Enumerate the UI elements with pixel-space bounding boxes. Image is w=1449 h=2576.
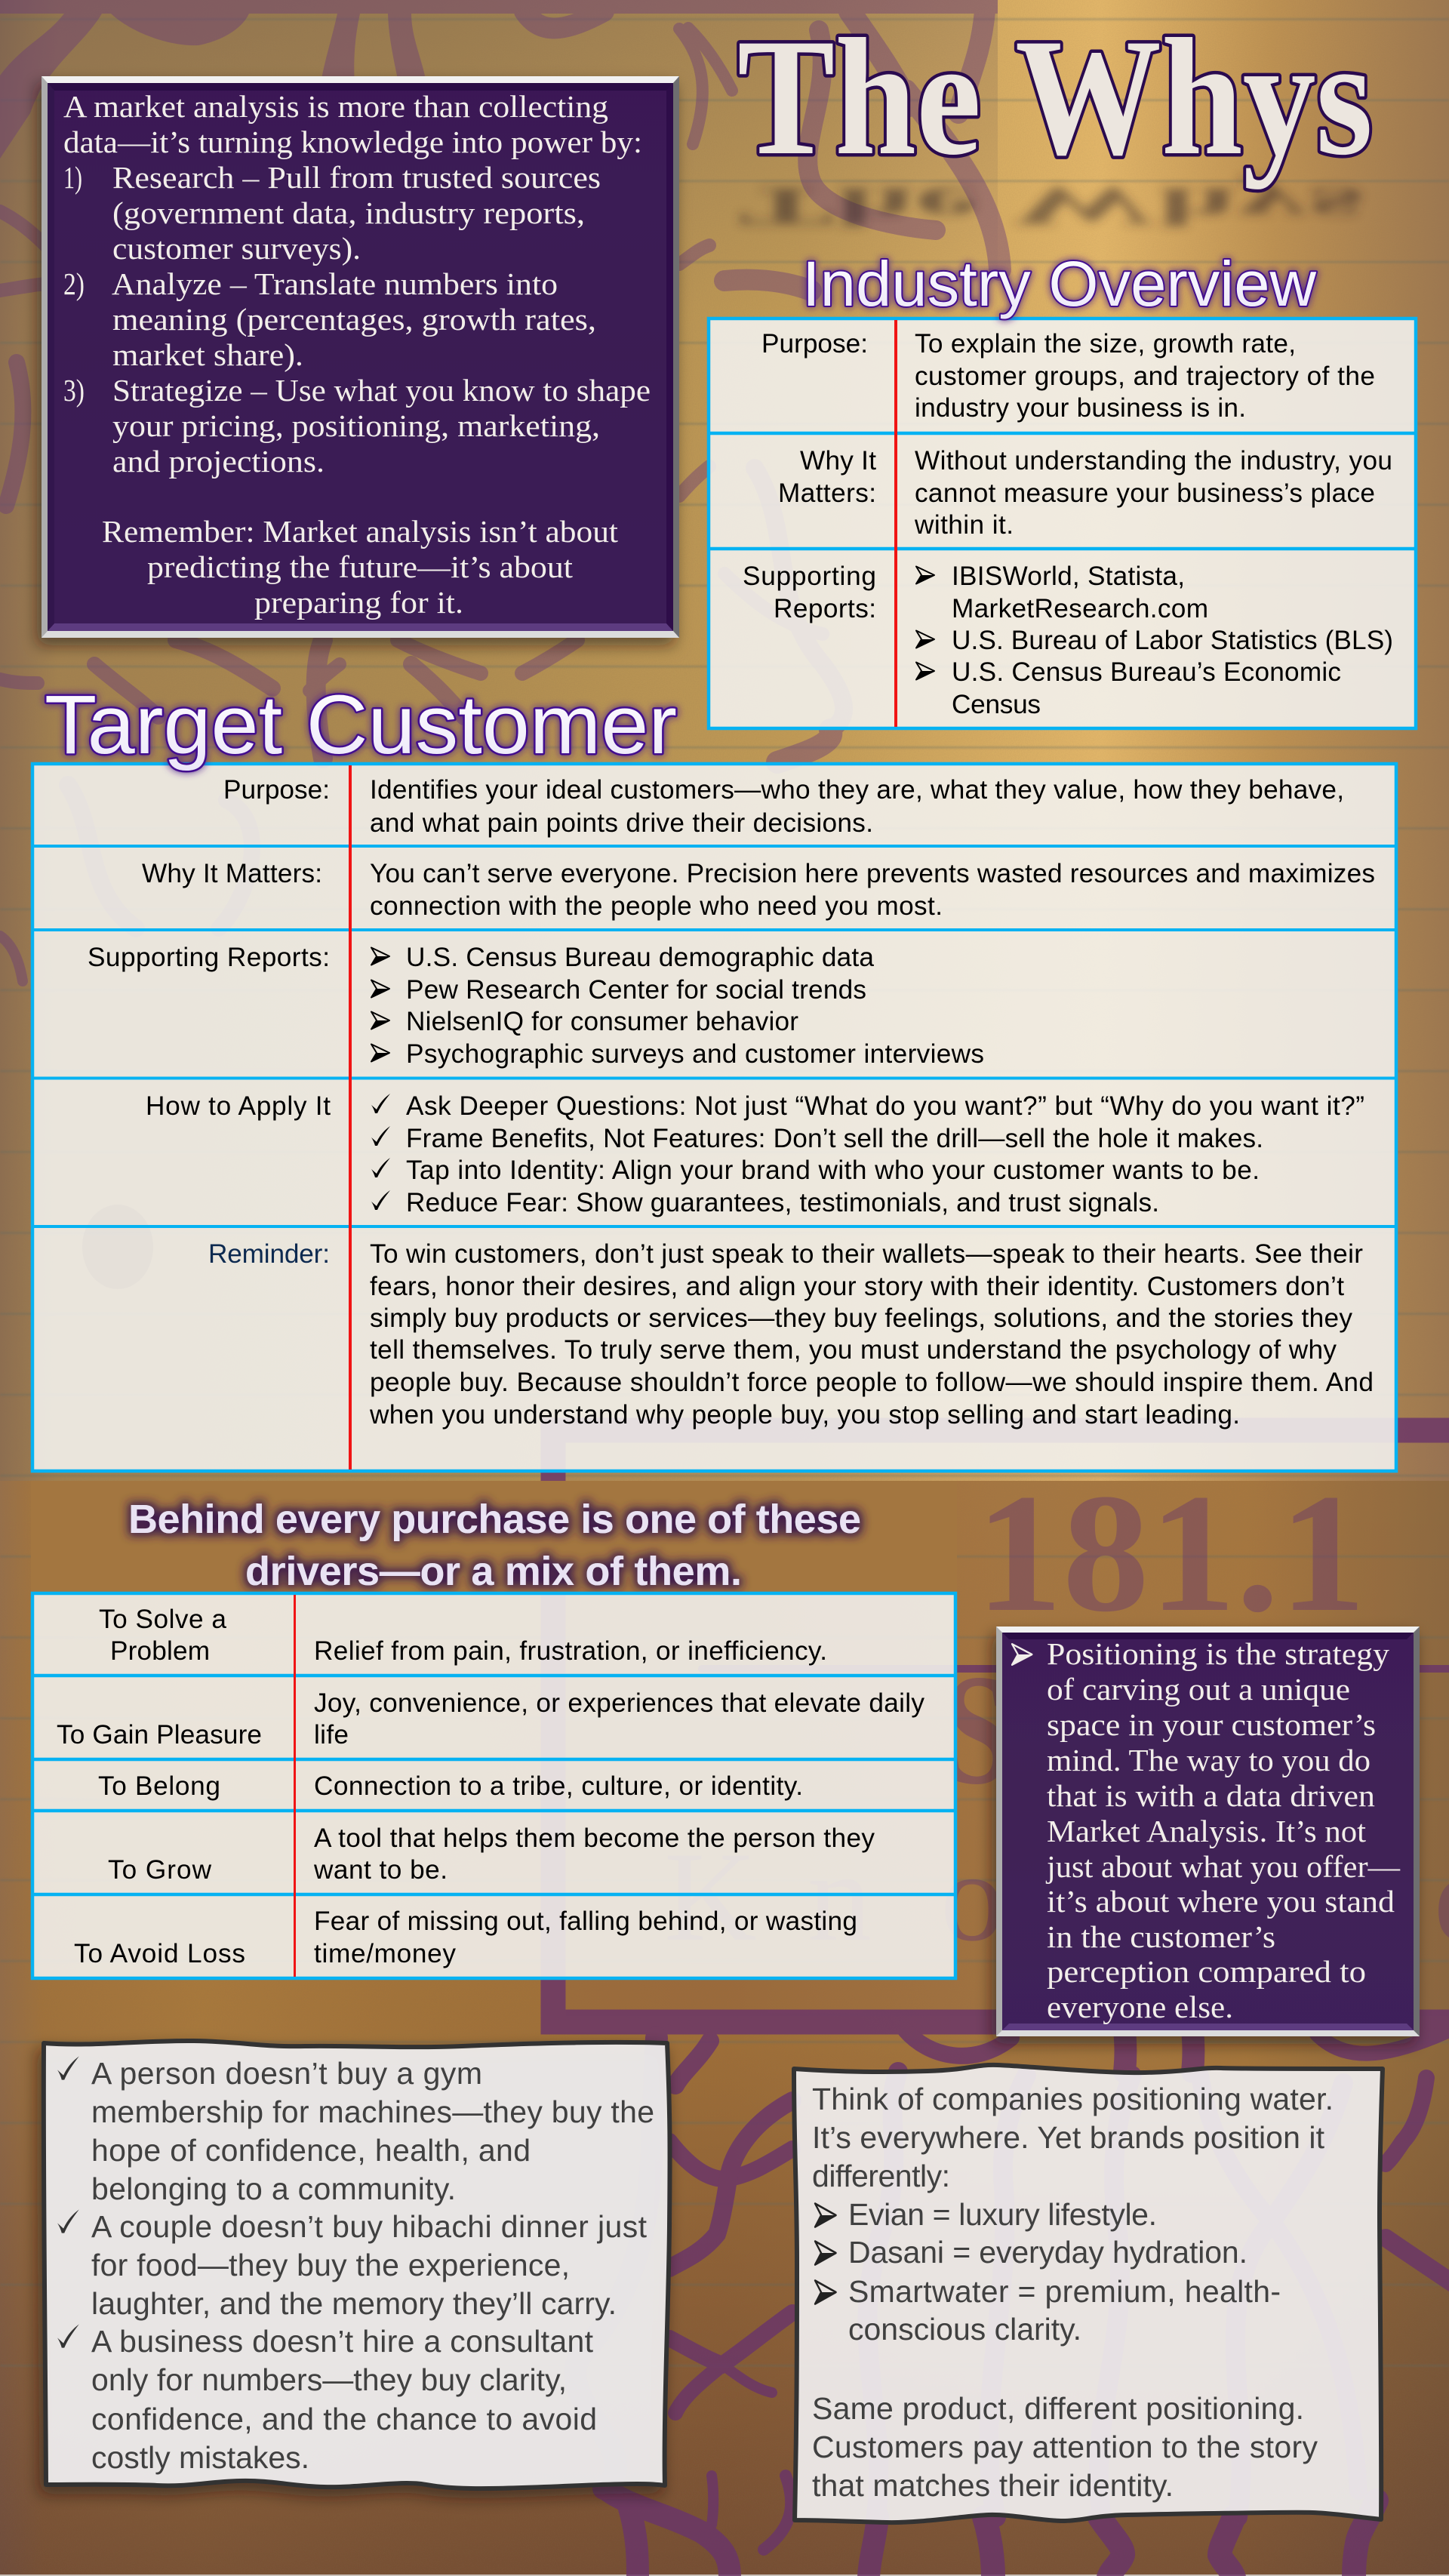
row: purpose: customer groups, and trajectory of the: [915, 362, 1375, 391]
heading: Target Customer: Target Customer: [45, 679, 677, 771]
wavy paper: [794, 2065, 1383, 2522]
definition text: that is with a data driven: [1047, 1778, 1375, 1813]
row: why it matters: connection with the people who need you most.: [370, 891, 943, 921]
row: to avoid loss: time/money: [314, 1939, 456, 1968]
row: supporting reports: Census: [952, 690, 1041, 719]
row: supporting reports: [743, 562, 1393, 719]
row: how to apply it: [146, 1091, 1364, 1217]
definition text: of carving out a unique: [1047, 1672, 1350, 1707]
row: how to apply it: Frame Benefits, Not Features: Don’t sell the drill—sell the hole it makes.: [406, 1124, 1263, 1153]
example: consultant: A business doesn’t hire a consultant: [91, 2324, 594, 2359]
panel: market analysis summary: data—it’s turning knowledge into power by:: [63, 125, 642, 159]
row: supporting reports: Psychographic surveys and customer interviews: [406, 1039, 984, 1069]
row: reminder: To win customers, don’t just speak to their wallets—speak to their hearts. See their: [370, 1239, 1363, 1269]
numbered list: [63, 160, 651, 479]
row: to grow: A tool that helps them become the person they: [314, 1824, 875, 1853]
table: target customer: [32, 764, 1396, 1471]
row: to avoid loss: [74, 1907, 857, 1968]
numbered list: 1): [63, 160, 82, 195]
heading: Industry Overview: Industry Overview: [802, 248, 1316, 319]
brand list: Evian = luxury lifestyle.: [848, 2197, 1157, 2232]
numbered list: 2): [63, 266, 85, 301]
conclusion text: Same product, different positioning.: [812, 2391, 1304, 2426]
panel frame and fill: [42, 76, 679, 638]
row: to belong: [98, 1771, 803, 1801]
title: The Whys: The Whys: [737, 5, 1373, 190]
brand list: conscious clarity.: [848, 2312, 1081, 2347]
row: why it matters: You can’t serve everyone. Precision here prevents wasted resources and maximizes: [370, 859, 1375, 888]
row: purpose: Purpose:: [761, 329, 868, 359]
remember note: preparing for it.: [254, 585, 463, 620]
panel: positioning definition: [996, 1627, 1420, 2036]
faded number 181.1: 181.1: [976, 1458, 1366, 1647]
panel: market analysis summary: [42, 76, 679, 638]
row: to belong: Connection to a tribe, culture, or identity.: [314, 1771, 803, 1801]
row: supporting reports: MarketResearch.com: [952, 594, 1208, 623]
row: why it matters: cannot measure your business’s place: [915, 479, 1375, 508]
example: gym membership: A person doesn’t buy a gym: [91, 2056, 482, 2091]
row: supporting reports: Supporting: [743, 562, 876, 591]
row: why it matters: Why It Matters:: [142, 859, 322, 888]
row: purpose: and what pain points drive their decisions.: [370, 808, 873, 838]
row: to grow: [108, 1824, 875, 1885]
row: to gain pleasure: Joy, convenience, or experiences that elevate daily: [314, 1688, 924, 1718]
row: reminder: fears, honor their desires, and align your story with their identity. Customers don’t: [370, 1272, 1344, 1301]
row: reminder: tell themselves. To truly serve them, you must understand the psychology of why: [370, 1335, 1337, 1365]
row: why it matters: Matters:: [778, 479, 876, 508]
numbered list: 3): [63, 373, 85, 408]
row: purpose: Identifies your ideal customers—who they are, what they value, how they behave,: [370, 775, 1344, 805]
numbered list: and projections.: [112, 444, 325, 479]
row: purpose: [761, 329, 1375, 423]
row: to gain pleasure: [57, 1688, 924, 1750]
example: hibachi dinner: A couple doesn’t buy hibachi dinner just: [91, 2209, 648, 2244]
panel: backing behind purchase drivers heading: [31, 1481, 957, 1593]
remember note: Remember: Market analysis isn’t about: [102, 514, 619, 549]
intro text: [812, 2082, 1334, 2193]
definition text: space in your customer’s: [1047, 1707, 1376, 1742]
row: supporting reports: Reports:: [774, 594, 876, 623]
bullet arrow: [1012, 1644, 1032, 1665]
definition text: it’s about where you stand: [1047, 1884, 1395, 1919]
conclusion text: [812, 2391, 1318, 2503]
row: supporting reports: [88, 943, 984, 1069]
row: reminder: [208, 1239, 1374, 1430]
example: gym membership: [57, 2056, 654, 2206]
row: to gain pleasure: life: [314, 1720, 349, 1750]
example: hibachi dinner: laughter, and the memory they’ll carry.: [91, 2286, 617, 2321]
row: how to apply it: How to Apply It: [146, 1091, 331, 1121]
heading: behind every purchase: [128, 1497, 861, 1594]
row: why it matters: Without understanding the industry, you: [915, 446, 1392, 475]
numbered list: market share).: [112, 337, 303, 372]
example: hibachi dinner: for food—they buy the experience,: [91, 2248, 570, 2282]
example: consultant: confidence, and the chance to avoid: [91, 2402, 597, 2436]
intro text: It’s everywhere. Yet brands position it: [812, 2120, 1325, 2155]
numbered list: Research – Pull from trusted sources: [112, 160, 601, 195]
example: hibachi dinner: [57, 2209, 648, 2321]
row: to avoid loss: To Avoid Loss: [74, 1939, 245, 1968]
row: why it matters: Why It: [800, 446, 876, 475]
row: to solve a problem: Relief from pain, frustration, or inefficiency.: [314, 1636, 827, 1666]
definition text: Market Analysis. It’s not: [1047, 1814, 1367, 1848]
table: purchase drivers: [32, 1593, 955, 1978]
intro text: differently:: [812, 2159, 950, 2193]
numbered list: your pricing, positioning, marketing,: [112, 408, 600, 443]
panel frame and fill: [996, 1627, 1420, 2036]
row: supporting reports: NielsenIQ for consumer behavior: [406, 1007, 798, 1036]
panel: purchase examples note: [44, 2041, 670, 2488]
definition text: mind. The way to you do: [1047, 1743, 1371, 1777]
example: gym membership: hope of confidence, health, and: [91, 2133, 531, 2168]
row: why it matters: within it.: [914, 510, 1014, 540]
row: to solve a problem: To Solve a: [99, 1605, 226, 1634]
wavy paper: [44, 2041, 670, 2488]
row: reminder: simply buy products or services—they buy feelings, solutions, and the stories they: [370, 1303, 1352, 1333]
definition text: [1045, 1636, 1401, 2024]
row: purpose: Purpose:: [223, 775, 330, 805]
remember note: predicting the future—it’s about: [147, 549, 574, 584]
row: to grow: To Grow: [108, 1855, 212, 1885]
example: consultant: [57, 2324, 597, 2475]
row: purpose: To explain the size, growth rate,: [915, 329, 1296, 359]
numbered list: meaning (percentages, growth rates,: [112, 302, 596, 337]
remember note: [102, 514, 619, 620]
row: to solve a problem: Problem: [110, 1636, 210, 1666]
example: consultant: only for numbers—they buy clarity,: [91, 2362, 567, 2397]
background: lower purple frame and branches: [553, 1430, 1449, 2576]
row: reminder: people buy. Because shouldn’t force people to follow—we should inspire them. And: [370, 1368, 1374, 1397]
row: supporting reports: Pew Research Center for social trends: [406, 975, 866, 1005]
row: how to apply it: Reduce Fear: Show guarantees, testimonials, and trust signals.: [406, 1188, 1159, 1217]
row: to solve a problem: [99, 1605, 827, 1666]
numbered list: customer surveys).: [112, 231, 361, 266]
heading: behind every purchase: Behind every purchase is one of these: [128, 1497, 861, 1542]
example: gym membership: belonging to a community.: [91, 2171, 456, 2206]
brand list: Dasani = everyday hydration.: [848, 2235, 1247, 2270]
example: gym membership: membership for machines—they buy the: [91, 2094, 654, 2129]
conclusion text: that matches their identity.: [812, 2468, 1174, 2503]
intro text: A market analysis is more than collecting: [63, 89, 608, 124]
intro text: Think of companies positioning water.: [812, 2082, 1334, 2116]
row: purpose: [223, 775, 1344, 838]
row: purpose: industry your business is in.: [915, 393, 1246, 423]
definition text: just about what you offer—: [1045, 1849, 1401, 1884]
row: to gain pleasure: To Gain Pleasure: [57, 1720, 262, 1750]
heading: behind every purchase: drivers—or a mix of them.: [245, 1549, 742, 1594]
row: to belong: To Belong: [98, 1771, 220, 1801]
definition text: Positioning is the strategy: [1047, 1636, 1390, 1671]
row: supporting reports: U.S. Bureau of Labor Statistics (BLS): [952, 626, 1393, 655]
row: supporting reports: IBISWorld, Statista,: [952, 562, 1185, 591]
numbered list: Analyze – Translate numbers into: [112, 266, 558, 301]
row: reminder: Reminder:: [208, 1239, 330, 1269]
definition text: in the customer’s: [1047, 1919, 1275, 1954]
row: why it matters: [142, 859, 1375, 921]
row: supporting reports: U.S. Census Bureau’s Economic: [952, 657, 1341, 687]
example: consultant: costly mistakes.: [91, 2440, 309, 2475]
table: industry overview: [709, 319, 1416, 728]
brand list: Smartwater = premium, health-: [848, 2274, 1281, 2309]
row: reminder: when you understand why people buy, you stop selling and start leading.: [369, 1400, 1240, 1430]
numbered list: (government data, industry reports,: [112, 195, 585, 230]
brand list: [815, 2197, 1281, 2347]
row: supporting reports: Supporting Reports:: [88, 943, 330, 972]
definition text: perception compared to: [1047, 1954, 1366, 1989]
row: why it matters: [778, 446, 1392, 540]
row: how to apply it: Tap into Identity: Align your brand with who your customer wants to be.: [406, 1156, 1260, 1185]
definition text: everyone else.: [1047, 1990, 1233, 2024]
background: upper purple branches: [0, 0, 1000, 981]
row: how to apply it: Ask Deeper Questions: Not just “What do you want?” but “Why do you want it?”: [406, 1091, 1364, 1121]
row: supporting reports: U.S. Census Bureau demographic data: [406, 943, 874, 972]
title reflection: The Whys: [738, 177, 1364, 236]
row: to grow: want to be.: [313, 1855, 448, 1885]
background: faded numeral and lettering: [664, 1458, 1449, 1968]
row: to avoid loss: Fear of missing out, falling behind, or wasting: [314, 1907, 857, 1936]
panel: water positioning note: [794, 2065, 1383, 2522]
numbered list: Strategize – Use what you know to shape: [112, 373, 651, 408]
conclusion text: Customers pay attention to the story: [812, 2430, 1318, 2464]
